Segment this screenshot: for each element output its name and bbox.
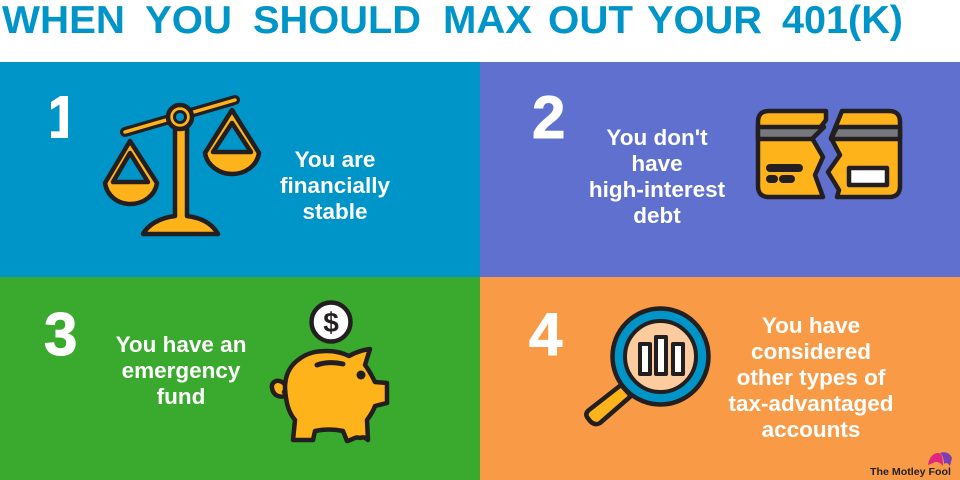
title: YOUR — [647, 0, 762, 42]
panel: financially stable — [0, 62, 480, 277]
text: other tax-advantaged accounts — [728, 313, 894, 442]
text: financially stable: stable — [302, 199, 368, 224]
text: emergency fund: emergency — [122, 358, 241, 383]
title: 401(K) — [782, 0, 903, 42]
panel: emergency fund — [0, 277, 480, 480]
number 1: 1 — [46, 84, 79, 151]
text: other tax-advantaged accounts: You have — [762, 313, 860, 338]
icon: piggy bank with coin: $ — [323, 307, 339, 338]
text: other tax-advantaged accounts: other types of — [737, 365, 886, 390]
text: financially stable: financially — [280, 173, 391, 198]
text: emergency fund: fund — [157, 384, 205, 409]
text: other tax-advantaged accounts: tax-advantaged — [728, 391, 894, 416]
text: financially stable: You are — [295, 147, 375, 172]
text: no high-interest debt: high-interest — [589, 177, 726, 202]
title: OUT — [548, 0, 633, 42]
number 2: 2 — [532, 84, 565, 151]
text: no high-interest debt: You don't — [606, 125, 708, 150]
logo: The Motley Fool: The Motley Fool — [870, 466, 951, 478]
text: no high-interest debt: debt — [633, 203, 681, 228]
number 4: 4 — [529, 301, 563, 368]
icon: magnifying glass with bar chart — [586, 308, 708, 424]
title: MAX — [443, 0, 532, 42]
text: no high-interest debt — [589, 125, 726, 228]
panel: other tax-advantaged accounts — [480, 277, 960, 480]
logo: The Motley Fool — [870, 452, 952, 478]
text: other tax-advantaged accounts: considered — [751, 339, 871, 364]
text: emergency fund — [116, 332, 246, 409]
text: other tax-advantaged accounts: accounts — [762, 417, 860, 442]
panel: no high-interest debt — [480, 62, 960, 277]
title: SHOULD — [253, 0, 421, 42]
icon: broken credit card — [758, 111, 900, 197]
title — [2, 0, 903, 42]
icon: balance scale — [105, 100, 259, 234]
title: WHEN — [2, 0, 125, 42]
number 3: 3 — [44, 301, 77, 368]
title: YOU — [145, 0, 232, 42]
text: financially stable — [280, 147, 391, 224]
text: no high-interest debt: have — [631, 151, 683, 176]
text: emergency fund: You have an — [116, 332, 246, 357]
icon: piggy bank with coin — [272, 302, 387, 441]
